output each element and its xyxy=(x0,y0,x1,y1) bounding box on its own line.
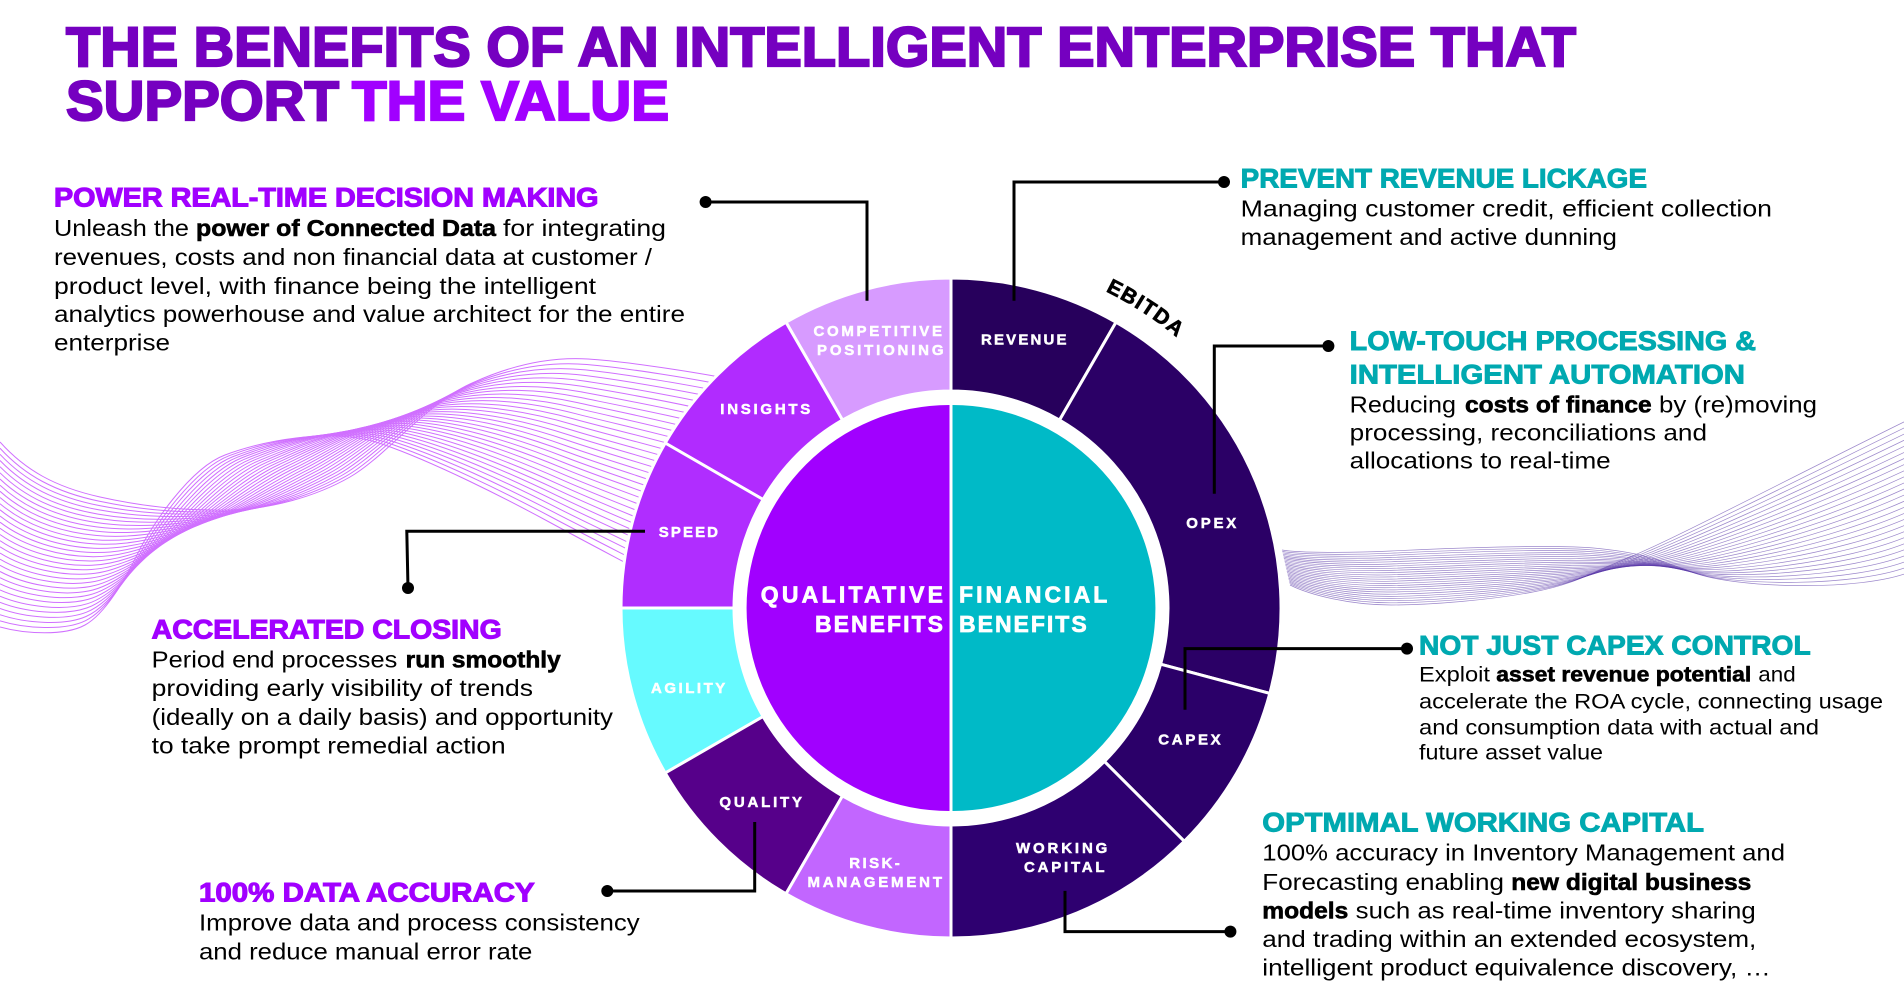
body text: analytics powerhouse and value architect for the entire xyxy=(54,301,685,327)
body text: by (re)moving xyxy=(1659,391,1817,417)
segment: insights xyxy=(665,322,842,500)
label: quality: QUALITY xyxy=(719,794,802,811)
body text: intelligent product equivalence discovery, … xyxy=(1262,955,1771,981)
body text: accelerate the ROA cycle, connecting usage xyxy=(1419,689,1883,713)
title: THE BENEFITS OF AN INTELLIGENT ENTERPRISE THAT xyxy=(66,15,1576,78)
heading xyxy=(1350,326,1756,389)
body text xyxy=(1241,196,1772,250)
body text xyxy=(152,646,613,758)
body text: and trading within an extended ecosystem, xyxy=(1262,926,1756,952)
body text: Reducing xyxy=(1350,391,1456,417)
center label: qualitative benefits xyxy=(761,581,943,637)
heading: ACCELERATED CLOSING xyxy=(152,614,502,644)
label: risk-management: RISK- xyxy=(849,855,900,872)
body text: providing early visibility of trends xyxy=(152,675,533,701)
body text: future asset value xyxy=(1419,740,1603,764)
heading: OPTMIMAL WORKING CAPITAL xyxy=(1262,808,1704,838)
body text: (ideally on a daily basis) and opportunity xyxy=(152,704,613,730)
segment: capex xyxy=(1104,664,1270,841)
body text: run smoothly xyxy=(406,646,561,672)
label: working capital xyxy=(1016,840,1107,876)
text block: accelerated closing xyxy=(152,614,613,758)
heading: LOW-TOUCH PROCESSING & xyxy=(1350,326,1756,356)
text block: optmimal working capital xyxy=(1262,808,1785,981)
connector: revenue xyxy=(1014,176,1230,301)
decorative wave: left purple ribbon xyxy=(0,359,760,633)
segment: quality xyxy=(665,716,842,894)
label: competitive positioning: POSITIONING xyxy=(817,342,944,359)
center label: financial benefits xyxy=(959,581,1107,637)
connector: competitive positioning xyxy=(700,196,867,301)
body text: Forecasting enabling xyxy=(1262,869,1504,895)
title: THE VALUE xyxy=(352,69,669,132)
segment: agility xyxy=(621,608,763,773)
segment: revenue xyxy=(951,278,1116,420)
text block: not just capex control xyxy=(1419,630,1883,764)
connector: quality xyxy=(601,822,755,897)
label: competitive positioning xyxy=(814,323,944,359)
center disc: qualitative half xyxy=(747,405,950,811)
body text: and consumption data with actual and xyxy=(1419,715,1819,739)
segment: working capital xyxy=(951,761,1184,938)
body text xyxy=(1419,663,1883,764)
heading: POWER REAL-TIME DECISION MAKING xyxy=(54,183,598,213)
body text: enterprise xyxy=(54,330,170,356)
text block: low-touch processing and intelligent automation xyxy=(1350,326,1817,473)
text block: 100% data accuracy xyxy=(199,878,640,964)
label: risk-management: MANAGEMENT xyxy=(808,874,942,891)
body text: new digital business xyxy=(1511,869,1751,895)
title xyxy=(66,15,1576,132)
body text: revenues, costs and non financial data at customer / xyxy=(54,244,653,270)
heading: NOT JUST CAPEX CONTROL xyxy=(1419,630,1811,660)
label: revenue: REVENUE xyxy=(981,332,1066,349)
EBITDA curved label: EBITDA xyxy=(1106,278,1182,338)
body text: such as real-time inventory sharing xyxy=(1356,898,1756,924)
connector: capex xyxy=(1185,643,1413,710)
body text: Unleash the xyxy=(54,215,189,241)
body text: costs of finance xyxy=(1465,391,1652,417)
label: working capital: WORKING xyxy=(1016,840,1107,857)
center label: financial benefits: FINANCIAL xyxy=(959,581,1107,607)
heading: INTELLIGENT AUTOMATION xyxy=(1350,359,1745,389)
body text: Period end processes xyxy=(152,646,397,672)
label: speed: SPEED xyxy=(659,524,718,541)
label: capex: CAPEX xyxy=(1158,732,1221,749)
body text: and xyxy=(1758,663,1796,687)
heading: PREVENT REVENUE LICKAGE xyxy=(1241,164,1647,194)
body text: processing, reconciliations and xyxy=(1350,419,1707,445)
body text: models xyxy=(1262,898,1348,924)
body text xyxy=(54,215,685,356)
connector: opex xyxy=(1214,340,1334,494)
body text: to take prompt remedial action xyxy=(152,732,506,758)
segment: risk-management xyxy=(786,796,951,938)
text block: power real-time decision making xyxy=(54,183,685,356)
label: insights: INSIGHTS xyxy=(720,401,810,418)
benefits wheel xyxy=(621,278,1281,938)
segment: speed xyxy=(621,443,763,608)
decorative wave: right indigo ribbon xyxy=(1282,419,1904,605)
center disc: financial half xyxy=(952,405,1155,811)
body text: and reduce manual error rate xyxy=(199,938,532,964)
body text xyxy=(1262,840,1785,981)
body text: Exploit xyxy=(1419,663,1490,687)
body text: for integrating xyxy=(503,215,666,241)
center label: qualitative benefits: BENEFITS xyxy=(815,611,943,637)
body text: power of Connected Data xyxy=(196,215,497,241)
label: opex: OPEX xyxy=(1186,515,1236,532)
text block: prevent revenue lickage xyxy=(1241,164,1772,250)
label: agility: AGILITY xyxy=(651,680,725,697)
body text: management and active dunning xyxy=(1241,224,1617,250)
center label: financial benefits: BENEFITS xyxy=(959,611,1087,637)
body text: Managing customer credit, efficient collection xyxy=(1241,196,1772,222)
body text xyxy=(199,910,640,964)
label: competitive positioning: COMPETITIVE xyxy=(814,323,942,340)
label: working capital: CAPITAL xyxy=(1024,859,1105,876)
body text: 100% accuracy in Inventory Management and xyxy=(1262,840,1785,866)
segment: competitive positioning xyxy=(786,278,951,420)
title: SUPPORT xyxy=(66,69,339,132)
center label: qualitative benefits: QUALITATIVE xyxy=(761,581,943,607)
segment: opex xyxy=(1060,322,1281,693)
connector: speed xyxy=(402,531,645,594)
body text xyxy=(1350,391,1817,473)
body text: asset revenue potential xyxy=(1496,663,1751,687)
label: risk-management xyxy=(808,855,942,891)
heading: 100% DATA ACCURACY xyxy=(199,878,535,908)
body text: allocations to real-time xyxy=(1350,447,1611,473)
body text: product level, with finance being the intelligent xyxy=(54,273,597,299)
body text: Improve data and process consistency xyxy=(199,910,640,936)
connector: working capital xyxy=(1065,891,1236,938)
